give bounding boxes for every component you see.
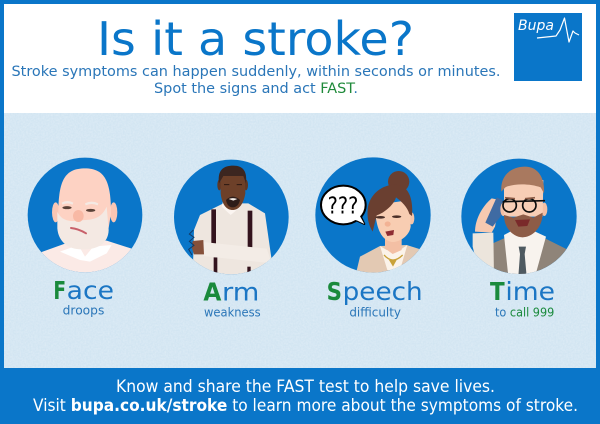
label: Time to call 999 xyxy=(490,277,555,320)
label: Face droops: droops xyxy=(63,302,104,317)
footer text: Visit bupa.co.uk/stroke to learn more about the symptoms of stroke. xyxy=(33,396,578,415)
icon: face droops xyxy=(28,158,142,277)
intro text xyxy=(12,64,500,97)
icon: arm weakness xyxy=(174,160,289,277)
label: Arm weakness xyxy=(203,278,261,319)
label: Arm weakness: rm xyxy=(222,278,259,307)
icon: speech difficulty xyxy=(315,157,431,277)
label: Speech difficulty: difficulty xyxy=(349,305,401,320)
intro text: Spot the signs and act FAST. xyxy=(154,81,358,97)
intro text: Stroke symptoms can happen suddenly, within seconds or minutes. xyxy=(12,64,500,80)
label: Time to call 999: T xyxy=(490,277,505,306)
icon: speech difficulty: ??? xyxy=(328,193,358,219)
label: Speech difficulty: S xyxy=(327,277,342,306)
label: Face droops: ace xyxy=(67,276,114,305)
label: Face droops: F xyxy=(53,276,66,305)
label: Time to call 999: ime xyxy=(505,277,555,306)
icon: time to call xyxy=(461,159,577,277)
label: Arm weakness: weakness xyxy=(204,304,261,319)
logo: Bupa: Bupa xyxy=(518,18,554,34)
label: Speech difficulty xyxy=(327,277,423,320)
footer text: Know and share the FAST test to help save lives. xyxy=(116,377,495,396)
footer text xyxy=(33,377,578,415)
title: Is it a stroke? xyxy=(97,12,414,66)
label: Time to call 999: to call 999 xyxy=(495,305,554,320)
logo: Bupa xyxy=(514,13,582,81)
label: Arm weakness: A xyxy=(203,278,222,307)
label: Face droops xyxy=(53,276,114,317)
label: Speech difficulty: peech xyxy=(343,277,423,306)
